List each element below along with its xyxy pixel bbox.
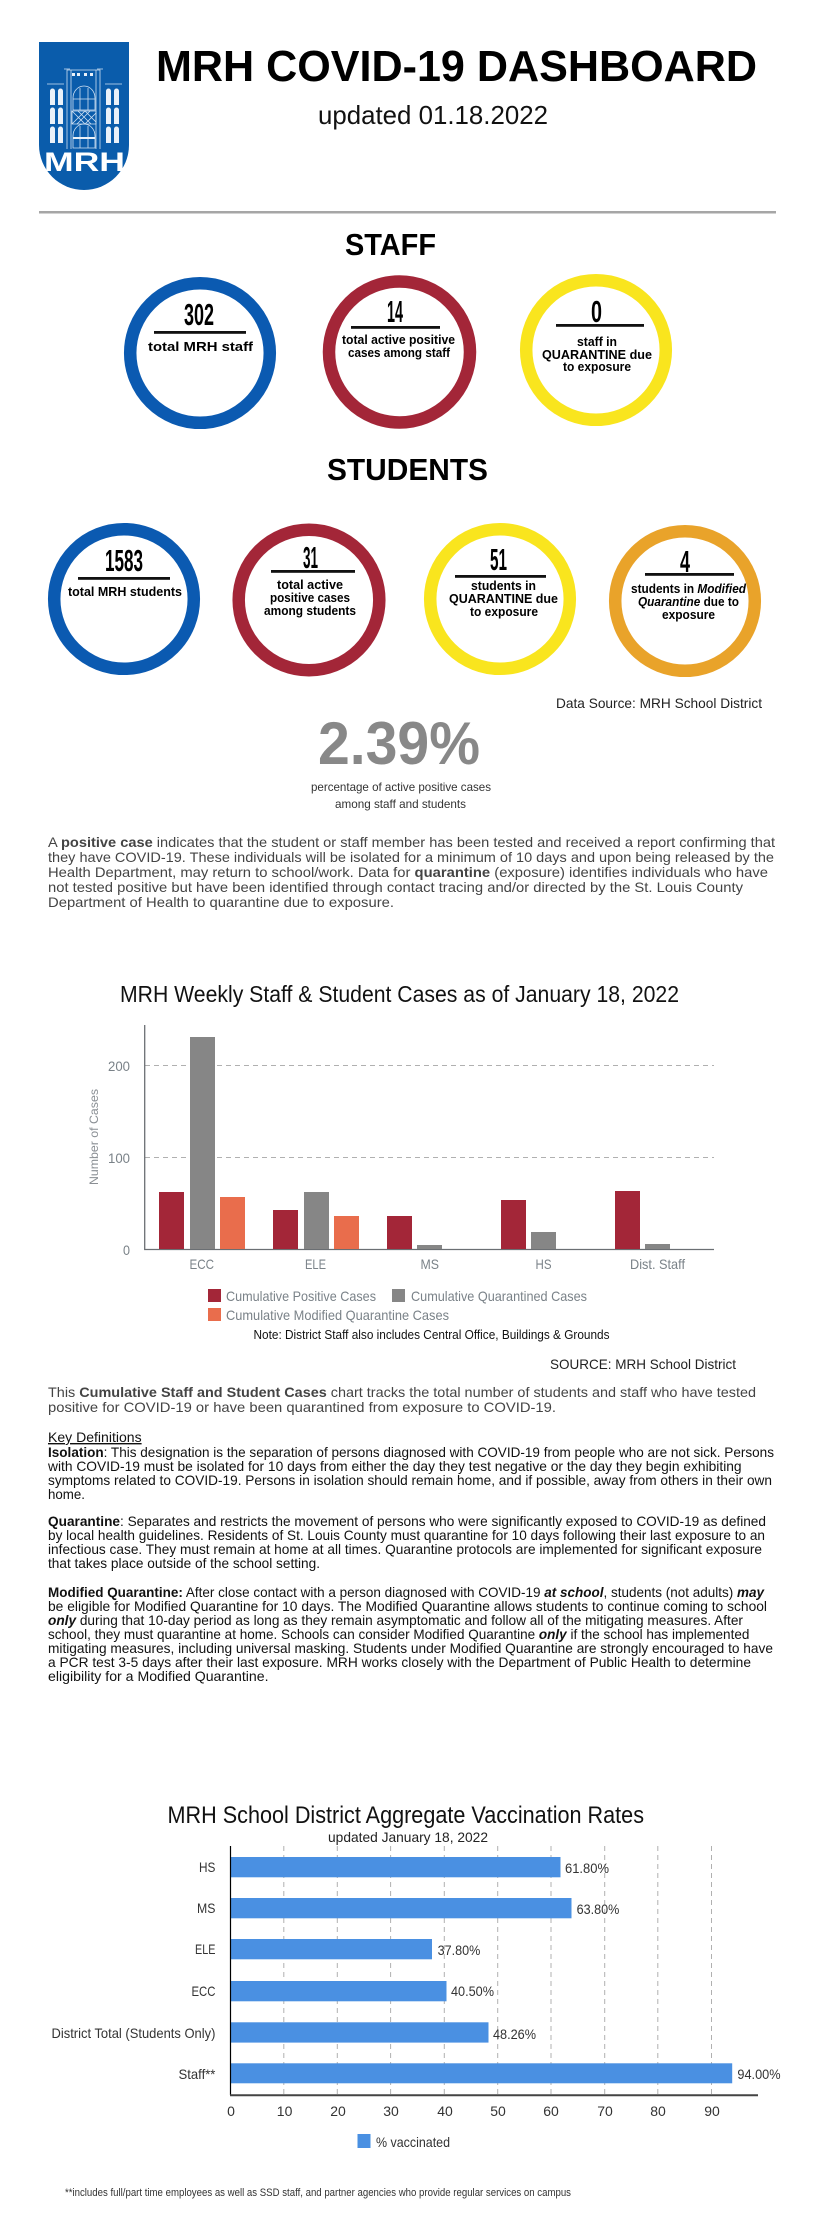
x axis tick labels: 70 bbox=[597, 2103, 613, 2119]
definition: modified quarantine: only during that 10-day period as long as they remain asymptomatic and follow all of the mitigating measures. After bbox=[48, 1612, 743, 1628]
bars bbox=[230, 1857, 732, 2083]
definitions heading: Key Definitions bbox=[48, 1429, 142, 1445]
text block: positive case explanation: not tested positive but have been identified through contact tracing and/or directed by the St. Louis County bbox=[48, 879, 743, 895]
subtitle date: updated 01.18.2022 bbox=[318, 100, 548, 130]
x axis labels: Dist. Staff bbox=[630, 1256, 685, 1272]
chart legend: Cumulative Positive Cases bbox=[226, 1288, 376, 1304]
x axis tick labels: 40 bbox=[437, 2103, 453, 2119]
stat: students modified quarantine bbox=[615, 531, 755, 671]
bars: Dist. Staff bbox=[615, 1191, 670, 1249]
category labels: District Total (Students Only) bbox=[52, 2025, 215, 2041]
chart legend: Cumulative Modified Quarantine Cases bbox=[226, 1307, 449, 1323]
value labels: 94.00% bbox=[737, 2066, 781, 2082]
stat: students active positive: 31 bbox=[303, 540, 318, 575]
value labels: 48.26% bbox=[493, 2026, 536, 2042]
chart legend: Cumulative Quarantined Cases bbox=[411, 1288, 587, 1304]
big stat: percent positive: percentage of active positive cases bbox=[311, 780, 491, 794]
x axis tick labels: 80 bbox=[650, 2103, 666, 2119]
panel: staff stats bbox=[130, 280, 666, 423]
category labels: ELE bbox=[195, 1941, 215, 1957]
y axis labels: Number of Cases bbox=[87, 1089, 101, 1185]
header bbox=[39, 42, 757, 190]
definition: quarantine: Quarantine: Separates and restricts the movement of persons who were significantly exposed to COVID-19 as defined bbox=[48, 1513, 766, 1529]
definition: isolation: home. bbox=[48, 1486, 85, 1502]
definition: quarantine: infectious case. They must remain at home at all times. Quarantine protocols are implemented for significant exposure bbox=[48, 1541, 762, 1557]
text block: positive case explanation: they have COVID-19. These individuals will be isolated for a minimum of 10 days and upon being released by the bbox=[48, 849, 774, 865]
big stat: percent positive bbox=[311, 710, 491, 811]
text block: positive case explanation: A positive case indicates that the student or staff member has been tested and received a report confirming that bbox=[48, 834, 775, 850]
stat: students modified quarantine: exposure bbox=[662, 607, 715, 622]
definition: isolation: symptoms related to COVID-19. Persons in isolation should remain home, and if possible, away from others in their own bbox=[48, 1472, 772, 1488]
value labels: 40.50% bbox=[451, 1983, 494, 1999]
definition: quarantine: by local health guidelines. Residents of St. Louis County must quarantine for 10 days following their last exposure to an bbox=[48, 1527, 765, 1543]
x axis tick labels: 20 bbox=[330, 2103, 346, 2119]
category labels: ECC bbox=[192, 1983, 215, 1999]
chart title: vaccination rates: MRH School District Aggregate Vaccination Rates bbox=[168, 1802, 644, 1829]
bars: HS bbox=[501, 1200, 556, 1249]
stat: total staff: total MRH staff bbox=[148, 339, 254, 354]
stat: staff quarantine: QUARANTINE due bbox=[542, 347, 652, 362]
text block: chart explanation bbox=[48, 1384, 756, 1415]
x axis tick labels: 10 bbox=[277, 2103, 293, 2119]
definition: isolation: Isolation: This designation is the separation of persons diagnosed with COVID-19 from people who are not sick. Persons bbox=[48, 1444, 774, 1460]
text block: positive case explanation: Department of Health to quarantine due to exposure. bbox=[48, 894, 394, 910]
text block: positive case explanation: Health Department, may return to school/work. Data for quarantine (exposure) identifies individuals who have bbox=[48, 864, 768, 880]
bars: ELE bbox=[273, 1192, 359, 1249]
definition: modified quarantine: be eligible for Modified Quarantine for 10 days. The Modified Quarantine allows students to continue coming to school bbox=[48, 1598, 767, 1614]
chart title: vaccination rates: updated January 18, 2022 bbox=[328, 1829, 488, 1845]
vaccination legend: % vaccinated bbox=[376, 2134, 450, 2150]
x axis labels: ECC bbox=[190, 1256, 214, 1272]
bars: ECC bbox=[159, 1037, 245, 1249]
value labels bbox=[438, 1860, 781, 2082]
stat: staff active positive: 14 bbox=[387, 294, 403, 329]
x axis tick labels: 30 bbox=[383, 2103, 399, 2119]
x axis labels: HS bbox=[536, 1256, 552, 1272]
stat: total students: total MRH students bbox=[68, 584, 182, 599]
icon: MRH logo shield bbox=[39, 42, 129, 190]
definition: isolation bbox=[47, 1444, 774, 1502]
stat: students modified quarantine: students in Modified bbox=[631, 581, 747, 596]
chart legend bbox=[208, 1288, 587, 1323]
footnote: **includes full/part time employees as well as SSD staff, and partner agencies who provide regular services on campus bbox=[65, 2187, 571, 2199]
stat: students active positive: positive cases bbox=[270, 590, 350, 605]
big stat: percent positive: among staff and students bbox=[335, 797, 466, 811]
bars: MS bbox=[387, 1216, 442, 1249]
icon: logo windows bbox=[50, 73, 119, 143]
panel: student stats bbox=[54, 529, 755, 671]
value labels: 37.80% bbox=[438, 1942, 480, 1958]
y axis labels: 0 bbox=[123, 1242, 130, 1258]
y axis labels bbox=[87, 1058, 130, 1258]
text block: positive case explanation bbox=[48, 834, 775, 910]
definition: modified quarantine: a PCR test 3-5 days after their last exposure. MRH works closely with the Department of Public Health to determine bbox=[48, 1654, 751, 1670]
definition: modified quarantine: Modified Quarantine: After close contact with a person diagnosed with COVID-19 at school, students (not adults) may bbox=[48, 1584, 765, 1600]
x axis tick labels: 90 bbox=[704, 2103, 720, 2119]
stat: staff quarantine: 0 bbox=[591, 294, 602, 329]
y axis labels: 200 bbox=[108, 1058, 130, 1074]
icon: MRH logo shield: MRH bbox=[44, 147, 125, 177]
chart note: Note: District Staff also includes Central Office, Buildings & Grounds bbox=[254, 1328, 610, 1342]
chart title: vaccination rates bbox=[168, 1802, 644, 1845]
bar chart: cumulative cases bbox=[87, 1025, 714, 1323]
stat: students quarantine: to exposure bbox=[470, 604, 538, 619]
stat: total students: 1583 bbox=[105, 543, 143, 578]
x axis labels: ELE bbox=[305, 1256, 326, 1272]
definition: modified quarantine bbox=[48, 1584, 773, 1684]
text block: chart explanation: This Cumulative Staff and Student Cases chart tracks the total number of students and staff who have tested bbox=[48, 1384, 756, 1400]
x axis labels: MS bbox=[420, 1256, 439, 1272]
stat: staff quarantine: to exposure bbox=[563, 359, 631, 374]
x axis tick labels: 60 bbox=[543, 2103, 559, 2119]
y axis labels: 100 bbox=[108, 1150, 130, 1166]
stat: staff active positive bbox=[329, 282, 470, 422]
title: MRH COVID-19 DASHBOARD bbox=[156, 42, 757, 91]
x axis tick labels bbox=[227, 2103, 720, 2119]
stat: students quarantine: 51 bbox=[490, 542, 507, 577]
definition: quarantine: that takes place outside of the school setting. bbox=[48, 1555, 320, 1571]
stat: staff active positive: total active positive bbox=[342, 332, 455, 347]
definition: modified quarantine: school, they must quarantine at home. Schools can consider Modified Quarantine only if the school has implemented bbox=[48, 1626, 749, 1642]
value labels: 63.80% bbox=[577, 1901, 619, 1917]
stat: total students bbox=[54, 529, 194, 669]
stat: students quarantine: students in bbox=[471, 578, 536, 593]
category labels bbox=[52, 1859, 216, 2082]
stat: students active positive bbox=[239, 530, 379, 670]
stat: staff quarantine: staff in bbox=[577, 334, 617, 349]
category labels: Staff** bbox=[178, 2066, 216, 2082]
definition: quarantine bbox=[48, 1513, 766, 1571]
stat: students quarantine bbox=[430, 529, 570, 669]
text block: chart explanation: positive for COVID-19 or have been quarantined from exposure to COVID-19. bbox=[48, 1399, 556, 1415]
x axis labels bbox=[190, 1256, 685, 1272]
value labels: 61.80% bbox=[565, 1860, 609, 1876]
chart title: weekly cases: MRH Weekly Staff & Student Cases as of January 18, 2022 bbox=[120, 981, 679, 1007]
text block: key definitions bbox=[47, 1429, 774, 1684]
stat: students modified quarantine: Quarantine due to bbox=[638, 594, 739, 609]
big stat: percent positive: 2.39% bbox=[318, 710, 480, 777]
data source note: Data Source: MRH School District bbox=[556, 695, 762, 711]
definition: modified quarantine: mitigating measures, including universal masking. Students under Modified Quarantine are strongly encouraged to have bbox=[48, 1640, 773, 1656]
stat: staff active positive: cases among staff bbox=[348, 345, 451, 360]
stat: total staff: 302 bbox=[184, 297, 214, 332]
stat: students active positive: among students bbox=[264, 603, 356, 618]
category labels: MS bbox=[197, 1900, 215, 1916]
stat: students modified quarantine: 4 bbox=[680, 544, 690, 579]
definition: modified quarantine: eligibility for a Modified Quarantine. bbox=[48, 1668, 268, 1684]
heading: staff: STAFF bbox=[345, 227, 436, 262]
stat: students quarantine: QUARANTINE due bbox=[449, 591, 558, 606]
x axis tick labels: 0 bbox=[227, 2103, 235, 2119]
x axis tick labels: 50 bbox=[490, 2103, 506, 2119]
definition: isolation: with COVID-19 must be isolated for 10 days from either the day they test negative or the day they begin exhibiting bbox=[47, 1458, 742, 1474]
heading: students: STUDENTS bbox=[327, 452, 488, 487]
bar chart: vaccination rates bbox=[52, 1846, 781, 2150]
category labels: HS bbox=[199, 1859, 215, 1875]
source note: SOURCE: MRH School District bbox=[550, 1356, 736, 1372]
stat: staff quarantine bbox=[526, 280, 666, 420]
stat: students active positive: total active bbox=[277, 577, 343, 592]
stat: total staff bbox=[130, 283, 270, 423]
